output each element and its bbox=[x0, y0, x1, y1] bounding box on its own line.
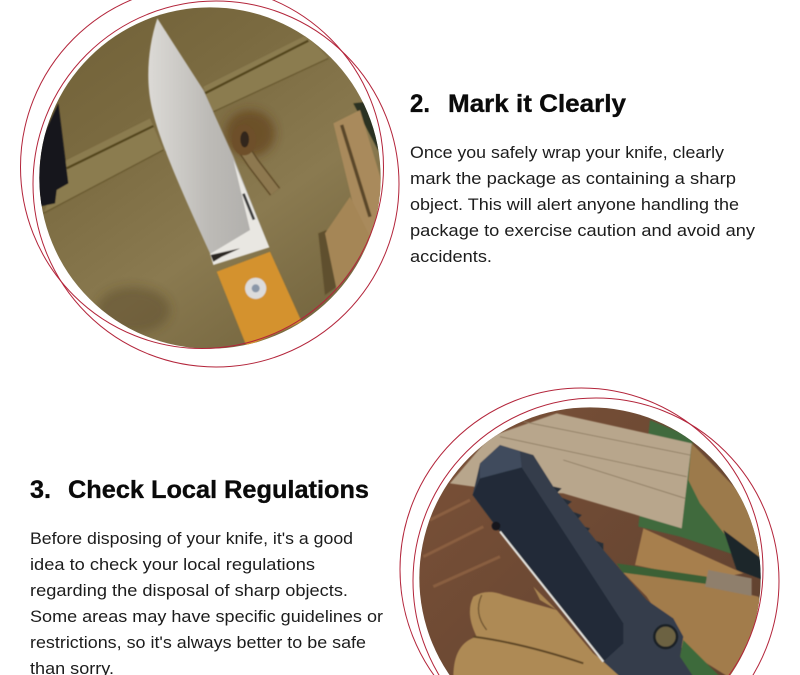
text block: step 2: Once you safely wrap your knife, clearly bbox=[410, 143, 725, 162]
text block: step 3: idea to check your local regulations bbox=[30, 555, 315, 574]
photo: black serrated knife with wood and gloves bbox=[417, 403, 767, 675]
knife handle bbox=[217, 252, 302, 347]
serrated teeth bbox=[552, 486, 604, 550]
tan glove right bbox=[688, 443, 767, 560]
text block: step 2: object. This will alert anyone handling the bbox=[410, 195, 739, 214]
tan glove centre bbox=[635, 528, 743, 580]
glove label bbox=[705, 570, 752, 596]
green fabric bbox=[638, 420, 740, 557]
text block: step 2: accidents. bbox=[410, 247, 492, 266]
heading: step 2: 2. bbox=[410, 90, 430, 118]
text block: step 3: regarding the disposal of sharp objects. bbox=[30, 581, 348, 600]
text block: step 2 bbox=[410, 143, 756, 266]
text block: step 3 bbox=[30, 529, 383, 675]
decorative rings: photo one bbox=[20, 0, 399, 367]
rope loop bbox=[232, 125, 275, 192]
glove fingers bbox=[453, 587, 623, 675]
handle pin bbox=[245, 278, 266, 299]
text block: step 2: package to exercise caution and avoid any bbox=[410, 221, 756, 240]
tan pouch bbox=[318, 100, 383, 295]
black knife body bbox=[473, 445, 693, 675]
dark shadow right bbox=[723, 530, 763, 580]
text block: step 3: Some areas may have specific guidelines or bbox=[30, 607, 383, 626]
white cutting edge bbox=[500, 532, 603, 662]
text block: step 2: mark the package as containing a sharp bbox=[410, 169, 736, 188]
text block: step 3: restrictions, so it's always better to be safe bbox=[30, 633, 366, 652]
green strip bottom bbox=[680, 640, 720, 675]
canvas strap bbox=[43, 35, 328, 213]
heading: step 2: Mark it Clearly bbox=[448, 90, 626, 118]
black object at left bbox=[38, 103, 68, 207]
text block: step 3: Before disposing of your knife, it's a good bbox=[30, 529, 353, 548]
rust stain bbox=[225, 110, 275, 157]
knife blade bbox=[148, 18, 269, 265]
tan glove lower right bbox=[623, 573, 767, 675]
heading: step 3: 3. bbox=[30, 476, 51, 504]
lanyard hole bbox=[655, 626, 676, 648]
wood plank bbox=[450, 413, 692, 528]
wood streaks bbox=[423, 500, 500, 587]
green strip bbox=[617, 563, 707, 587]
blade mark bbox=[242, 193, 255, 220]
decorative rings: photo two bbox=[400, 388, 779, 675]
heading: step 3: Check Local Regulations bbox=[68, 476, 369, 504]
photo: knife with yellow handle on canvas bbox=[33, 0, 387, 353]
